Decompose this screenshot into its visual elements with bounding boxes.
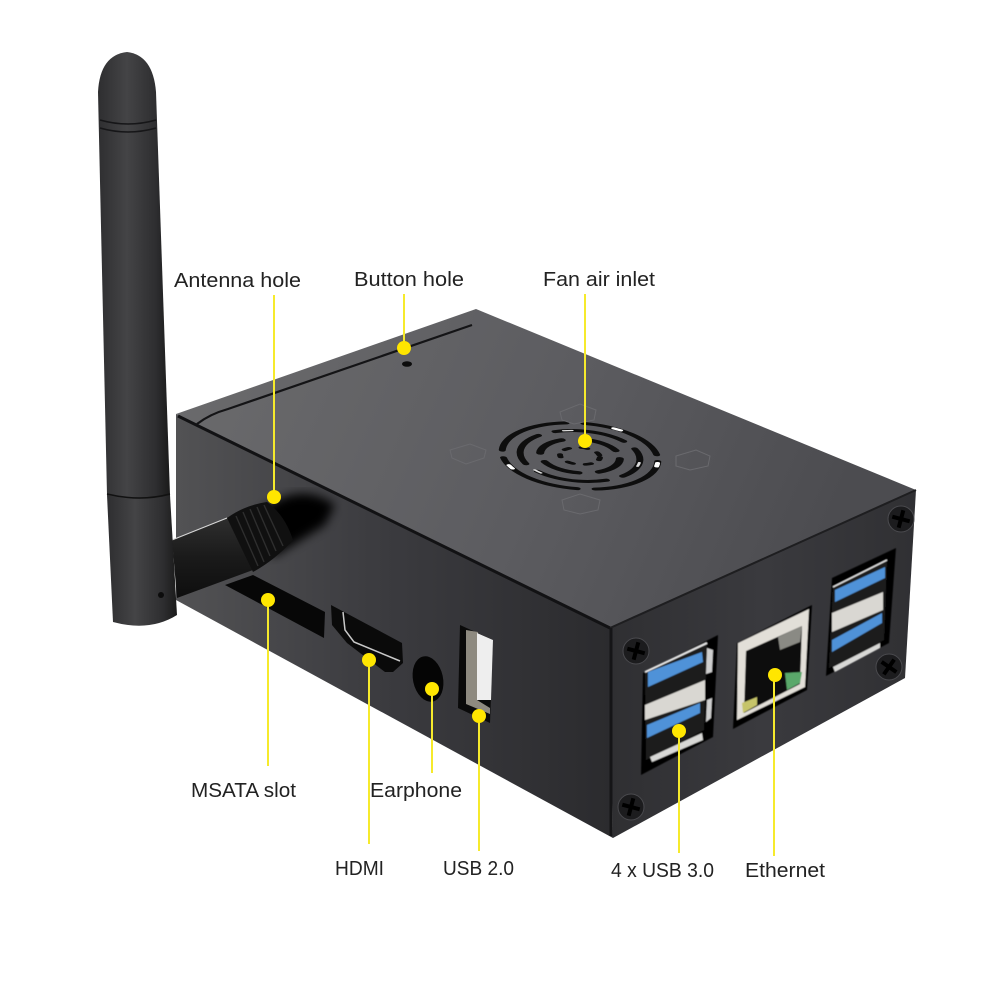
label: Button hole: Button hole <box>354 269 464 291</box>
port: Ethernet <box>733 605 812 729</box>
case body <box>176 309 916 838</box>
antenna connector shadow <box>262 494 335 558</box>
fan air inlet grille <box>500 418 660 494</box>
label: HDMI: HDMI <box>335 858 384 880</box>
label: Fan air inlet: Fan air inlet <box>543 269 655 291</box>
port: earphone jack <box>409 653 447 705</box>
label: USB 2.0: USB 2.0 <box>443 858 514 880</box>
antenna lower body <box>107 495 177 626</box>
port: MSATA slot <box>225 575 325 638</box>
callout lines and dots <box>268 294 774 856</box>
port: USB 2.0 <box>458 625 493 723</box>
port: left USB 3.0 stack <box>641 635 718 775</box>
label: Antenna hole: Antenna hole <box>174 270 301 292</box>
antenna <box>98 52 335 626</box>
top face <box>176 309 916 628</box>
label: Ethernet: Ethernet <box>745 860 825 882</box>
label: MSATA slot: MSATA slot <box>191 780 296 802</box>
antenna upper body <box>98 52 170 499</box>
port: right USB 3.0 stack <box>826 548 896 676</box>
antenna barrel <box>172 518 253 598</box>
label: Earphone: Earphone <box>370 780 462 802</box>
icon: screws <box>618 506 914 820</box>
label: 4 x USB 3.0: 4 x USB 3.0 <box>611 860 714 882</box>
port: HDMI <box>331 605 403 672</box>
icon: button hole <box>402 361 412 367</box>
fan mounting hexagons <box>450 404 710 514</box>
front face <box>610 490 916 838</box>
lid groove <box>197 325 472 424</box>
knurled nut <box>227 502 293 572</box>
left side face <box>176 414 613 838</box>
